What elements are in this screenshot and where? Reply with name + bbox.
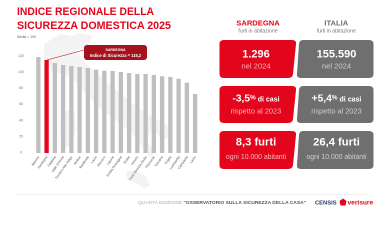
callout: Sardegna index: SARDEGNA: [105, 48, 126, 52]
logo: Censis: CENSIS: [315, 200, 337, 206]
region labels: Marche: [31, 155, 40, 167]
card: Sardegna variazione: [220, 86, 296, 123]
card: Italia furti per abitanti: 26,4 furti: [313, 137, 360, 149]
card: Italia variazione: +5,4: [312, 93, 332, 104]
logo: Verisure: verisure: [348, 199, 373, 206]
region labels: Liguria: [106, 155, 115, 166]
callout: Sardegna index: Indice di Sicurezza = 115,2: [90, 53, 142, 58]
card: Sardegna furti per abitanti: 8,3 furti: [236, 137, 276, 149]
footer text: QUARTA EDIZIONE "OSSERVATORIO SULLA SICUREZZA DELLA CASA": [138, 200, 306, 206]
card: Sardegna furti per abitanti: ogni 10.000 abitanti: [226, 154, 287, 161]
region labels: Valle d'Aosta: [51, 155, 65, 173]
logo: Verisure: [340, 198, 373, 206]
bar chart: [18, 54, 197, 181]
y axis labels: 100: [18, 70, 24, 74]
y axis labels: 40: [19, 118, 23, 122]
region labels: Veneto: [130, 155, 139, 166]
card: Italia furti per abitanti: ogni 10.000 abitanti: [306, 154, 367, 161]
title: SICUREZZA DOMESTICA 2025: [17, 20, 171, 32]
y axis labels: 60: [19, 102, 23, 106]
card: Italia furti 2024: [297, 40, 374, 78]
heading: Italia: furti in abitazione: [317, 28, 356, 34]
card: Sardegna variazione: di casi: [256, 96, 280, 103]
region labels: Lombardia: [169, 155, 181, 170]
region labels: Lazio: [189, 155, 197, 164]
region labels: Friuli Venezia Giulia: [128, 155, 148, 181]
region labels: Basilicata: [78, 155, 90, 169]
title: [17, 6, 171, 32]
card: Italia furti per abitanti: [297, 131, 374, 169]
y axis labels: 0: [20, 150, 22, 154]
highlighted bar: Sardegna: [44, 60, 49, 153]
card: Sardegna furti 2024: [220, 40, 296, 78]
axis subtitle: Media = 100: [17, 35, 36, 39]
y axis labels: 120: [18, 54, 24, 58]
card: Sardegna furti per abitanti: [220, 131, 296, 169]
card: Italia variazione: [297, 86, 374, 123]
grey bars: [36, 57, 197, 153]
background map of Italy: [44, 33, 172, 188]
region labels: Toscana: [153, 155, 164, 168]
region labels: Sicilia: [123, 155, 131, 165]
region labels: Molise: [73, 155, 82, 165]
card: Sardegna variazione: %: [250, 94, 256, 101]
card: Italia furti 2024: 155.590: [317, 48, 356, 60]
card: Sardegna variazione: -3,5: [232, 93, 250, 104]
heading: Sardegna: [236, 18, 280, 34]
region labels: [31, 155, 197, 181]
card: Italia variazione: di casi: [338, 96, 361, 103]
card: Italia variazione: rispetto al 2023: [311, 106, 362, 116]
heading: Italia: [317, 18, 356, 34]
callout: Sardegna index: [47, 45, 147, 60]
card: Sardegna furti 2024: 1.296: [242, 48, 270, 60]
card: Sardegna variazione: rispetto al 2023: [231, 106, 281, 116]
card: Italia furti 2024: nel 2024: [322, 62, 351, 71]
card: Sardegna furti 2024: nel 2024: [241, 62, 271, 71]
heading: Sardegna: SARDEGNA: [236, 18, 280, 28]
region labels: Piemonte: [145, 155, 156, 169]
title: INDICE REGIONALE DELLA: [17, 6, 154, 18]
region labels: Lazio: [90, 155, 98, 164]
region labels: Trentino Alto Adige: [54, 155, 73, 180]
y axis labels: [18, 54, 24, 154]
region labels: Puglia: [164, 155, 172, 165]
region labels: Sardegna: [37, 155, 48, 169]
region labels: Calabria: [46, 155, 57, 168]
heading: Italia: ITALIA: [324, 18, 349, 28]
y axis labels: 20: [19, 134, 23, 138]
y axis labels: 80: [19, 86, 23, 90]
region labels: Abruzzo: [96, 155, 106, 167]
region labels: Emilia Romagna: [106, 155, 123, 177]
heading: Sardegna: furti in abitazione: [238, 28, 278, 34]
card: Italia variazione: %: [332, 94, 338, 101]
region labels: Campania: [177, 155, 189, 170]
